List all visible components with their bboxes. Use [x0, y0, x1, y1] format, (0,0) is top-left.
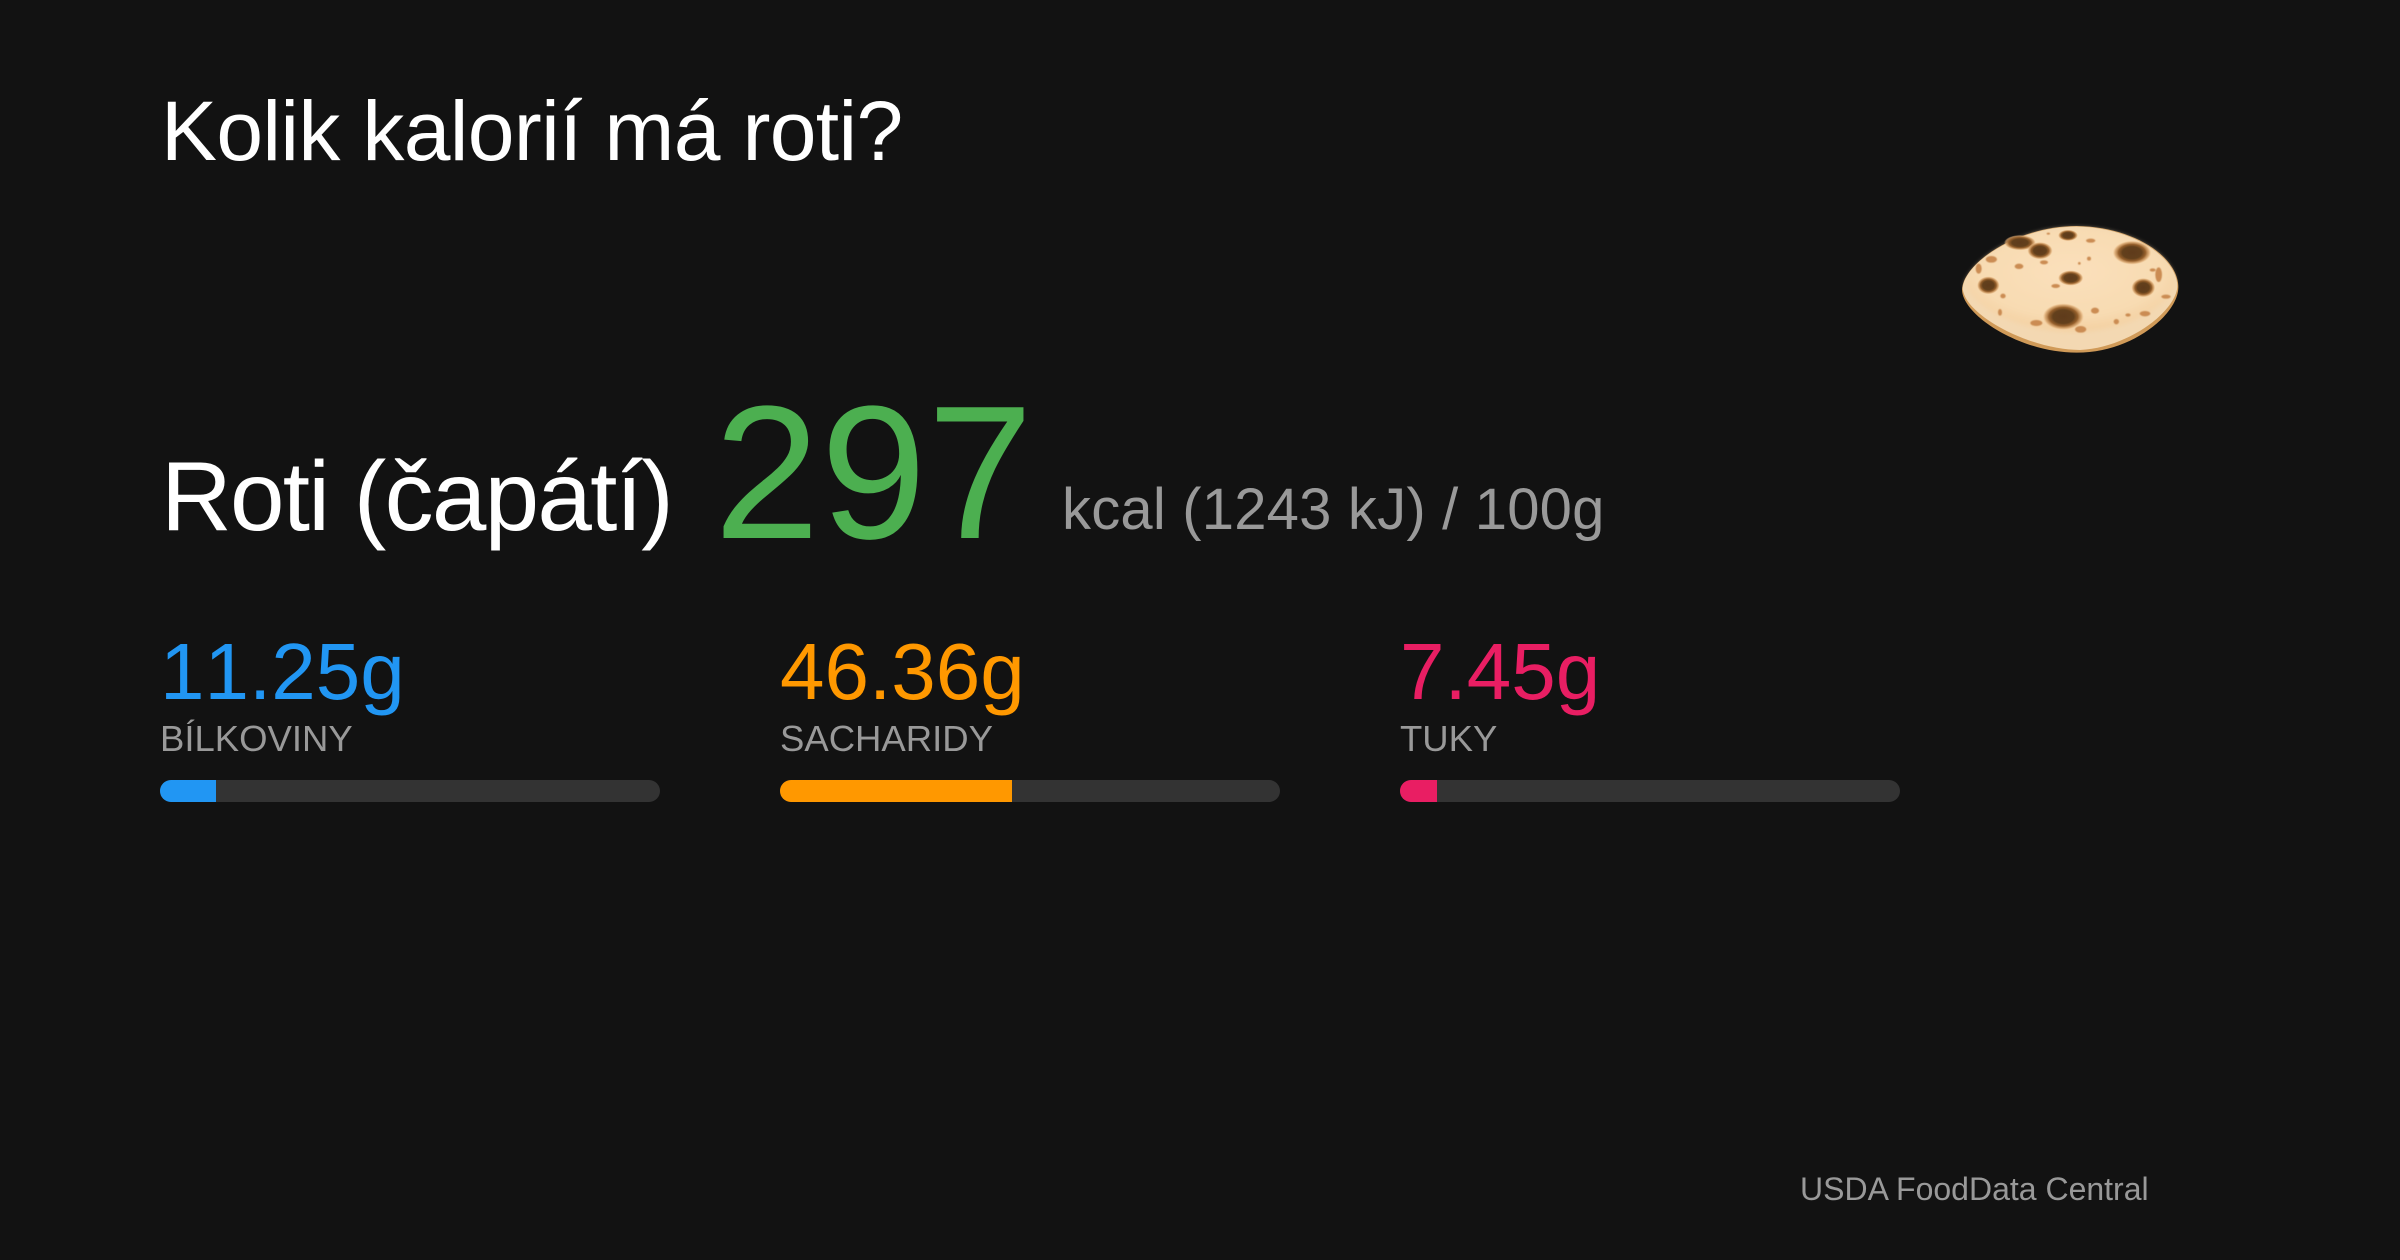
panel: protein — [160, 627, 660, 802]
calorie unit: kcal (1243 kJ) / 100g — [1062, 477, 1605, 542]
calorie value: 297 — [714, 367, 1034, 579]
panel: fat: 7.45g — [1400, 627, 1600, 716]
panel: fat: TUKY — [1400, 718, 1497, 759]
source: USDA FoodData Central — [1800, 1171, 2149, 1207]
food name: Roti (čapátí) — [161, 441, 672, 551]
panel: fat — [1400, 627, 1900, 802]
panel: carbohydrates: 46.36g — [780, 627, 1025, 716]
side of the bread — [1963, 227, 2177, 350]
top surface — [1965, 228, 2175, 332]
icon: roti flatbread — [1962, 224, 2179, 353]
panel: protein: 11.25g — [160, 627, 405, 716]
panel: protein: BÍLKOVINY — [160, 718, 353, 759]
title: Kolik kalorií má roti? — [161, 84, 903, 178]
panel: carbohydrates: SACHARIDY — [780, 718, 993, 759]
panel: carbohydrates — [780, 627, 1280, 802]
outer rim — [1962, 226, 2178, 353]
